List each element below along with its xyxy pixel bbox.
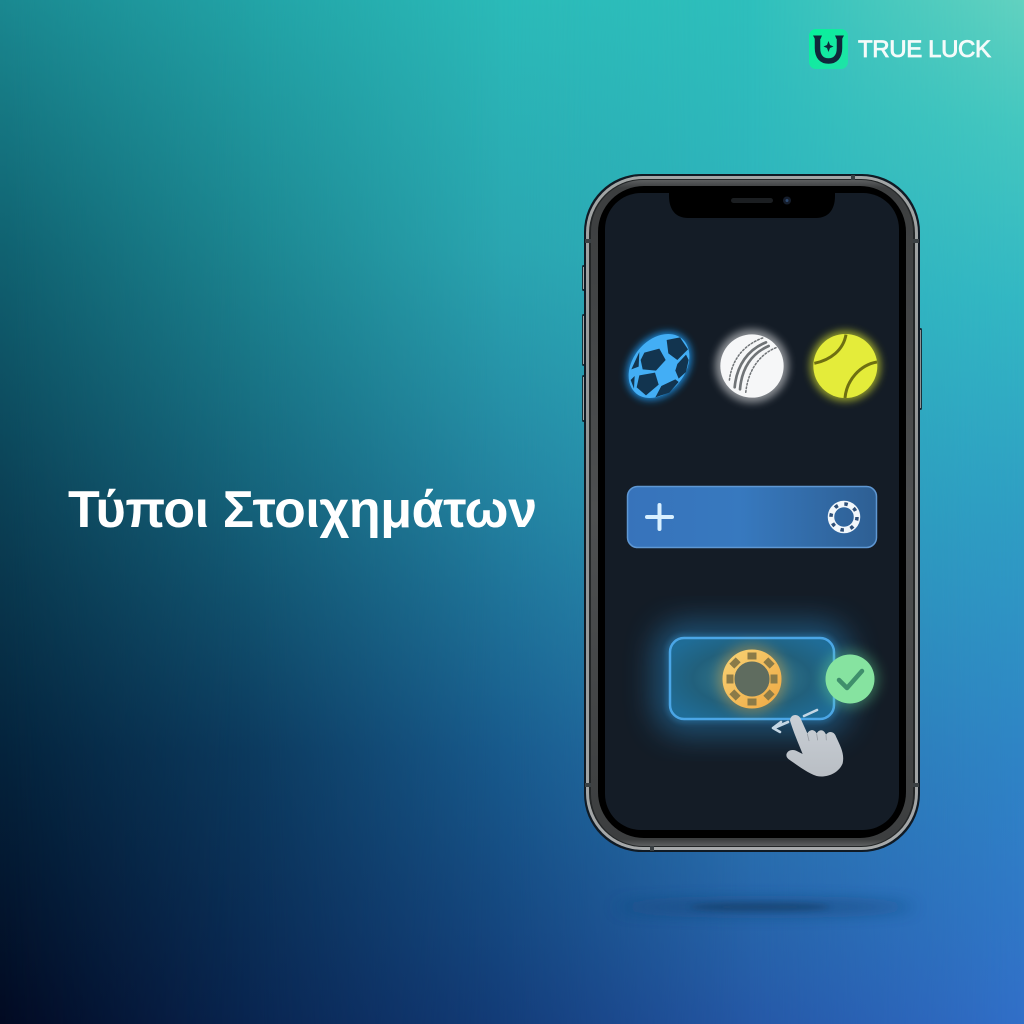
icon: green check badge (821, 650, 879, 708)
title: Τύποι Στοιχημάτων (68, 481, 537, 539)
icon: plus (647, 505, 672, 529)
icon: tennis ball (810, 331, 881, 401)
icon: gold chip (718, 645, 786, 713)
notch (669, 190, 835, 218)
phone frame (584, 174, 920, 852)
icon: pointing hand (786, 715, 843, 776)
phone side buttons (582, 265, 922, 422)
swipe arrow (773, 710, 817, 732)
phone (582, 174, 922, 852)
bet amount bar (628, 486, 876, 548)
stake card with chip (669, 637, 835, 720)
phone floor shadow (615, 901, 915, 913)
icon: cricket ball (715, 329, 789, 403)
phone screen (605, 193, 899, 830)
antenna bands (585, 175, 919, 851)
logo (809, 29, 991, 69)
logo icon: horseshoe (809, 29, 848, 69)
logo wordmark: TRUE LUCK (858, 36, 991, 63)
icon: soccer ball (614, 319, 704, 413)
icon: poker chip outline (831, 504, 857, 530)
